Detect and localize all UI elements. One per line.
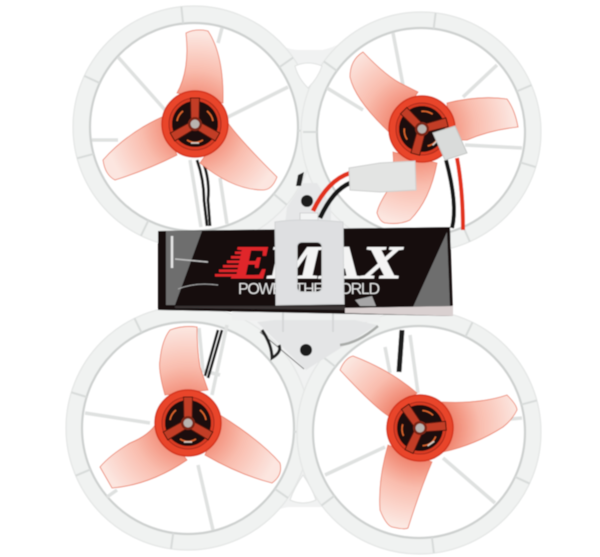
battery tagline: POWER THE WORLD [238,281,380,298]
duct: bottom right [297,310,541,554]
propeller: top left [103,30,277,190]
battery logo: red E: E [231,237,270,289]
power lead [313,173,350,218]
wires: bottom left [205,330,222,378]
motor: top left [162,91,228,157]
duct: top right [301,12,541,252]
screw: lower body [300,344,312,356]
battery [158,227,453,316]
propeller: bottom left [100,326,281,488]
motor: bottom left [155,390,221,456]
propeller: top right [350,52,518,224]
wires: bottom right [399,330,402,372]
upper mount plate [285,172,331,224]
motor lead wires [446,158,463,230]
frame: central bridge [240,26,372,525]
duct: bottom left [66,306,310,550]
strap [275,220,344,305]
screw: upper body [301,195,313,207]
duct: top left [73,6,315,248]
battery logo: MAX: MAX [267,237,404,289]
frame: top triangle hole [295,63,322,88]
motor: top right [375,82,469,176]
wires: top left [197,160,210,226]
battery connector [349,161,416,192]
motor: bottom right [374,382,466,474]
lower mount plate [232,310,380,370]
battery logo: speed stripes [215,247,252,277]
propeller: bottom right [340,356,517,529]
motor connector [433,126,467,160]
frame: bottom triangle hole [290,475,316,503]
